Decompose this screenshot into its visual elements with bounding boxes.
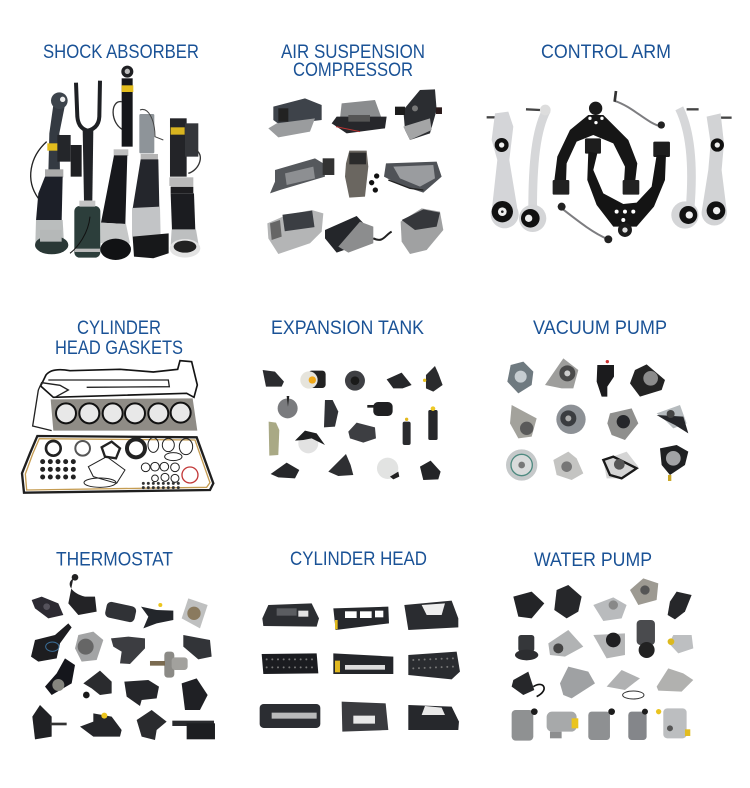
tank r2-3 xyxy=(367,402,393,416)
black upper arm xyxy=(553,102,639,195)
panel: vacuum pump xyxy=(506,317,688,481)
compressor 2 xyxy=(332,100,387,133)
panel: cylinder head gaskets xyxy=(22,317,213,493)
thermostat r3-1 xyxy=(45,658,75,695)
pump r2-1 xyxy=(510,405,537,438)
tank r4-1 xyxy=(271,463,299,478)
compressor 7 xyxy=(267,210,323,254)
thermostat r4-3 xyxy=(137,710,167,740)
pump r2-4 xyxy=(637,620,655,658)
pump r1-2 xyxy=(545,358,578,388)
pump r1-3 xyxy=(593,597,627,621)
cover r2-3 xyxy=(408,652,460,679)
pump r3-3 xyxy=(607,670,644,699)
thermostat r1-2 xyxy=(68,574,97,615)
cover r3-1 xyxy=(260,704,320,728)
tank r4-3 xyxy=(377,458,399,479)
heading: cylinder head gaskets: HEAD GASKETS xyxy=(55,337,183,359)
photo: gasket set xyxy=(22,361,213,493)
pump r4-2 xyxy=(547,712,578,738)
tank r1-4 xyxy=(387,373,412,388)
cover r2-1 xyxy=(262,653,318,674)
lower gasket with parts xyxy=(22,436,213,493)
tank r1-3 xyxy=(345,371,365,391)
heading: shock absorber: SHOCK ABSORBER xyxy=(43,41,199,63)
pump r1-4 xyxy=(630,578,658,605)
photo: five air struts xyxy=(31,66,200,260)
cover r1-3 xyxy=(404,601,458,630)
tank r3-3 xyxy=(348,423,376,443)
heading: air suspension compressor: COMPRESSOR xyxy=(293,59,413,81)
pump r2-4 xyxy=(657,405,688,433)
thermostat r4-1 xyxy=(32,705,67,739)
tank r2-4 xyxy=(428,406,438,440)
pump r1-5 xyxy=(668,592,692,619)
thermostat r1-4 xyxy=(141,603,173,628)
cover r1-2 xyxy=(333,607,389,630)
photo: nine valve covers xyxy=(260,601,460,732)
pump r4-5 xyxy=(656,708,690,738)
tank r2-1 xyxy=(278,396,298,418)
pump r2-2 xyxy=(548,630,583,657)
heading: air suspension compressor xyxy=(281,41,425,81)
thermostat r2-5 xyxy=(183,635,212,659)
panel: thermostat xyxy=(31,548,215,740)
photo: nine compressors xyxy=(267,89,443,254)
heading: vacuum pump: VACUUM PUMP xyxy=(533,317,667,339)
strut 1 xyxy=(31,92,82,254)
photo: nineteen water pumps xyxy=(512,578,693,741)
strut 3 xyxy=(100,66,133,260)
photo: control arms set xyxy=(487,91,732,243)
pump r2-2 xyxy=(556,405,586,434)
heading: thermostat: THERMOSTAT xyxy=(56,548,173,570)
strut 2: fork xyxy=(70,81,100,258)
aluminium arm right curved xyxy=(671,108,699,229)
thermostat r2-2 xyxy=(75,632,103,662)
aluminium arm far left xyxy=(487,112,519,228)
panel: shock absorber xyxy=(31,41,200,260)
stabiliser link lower xyxy=(558,203,612,243)
pump r1-1 xyxy=(507,362,533,393)
pump r3-3 xyxy=(603,452,638,478)
pump r4-1 xyxy=(512,708,538,741)
thermostat r1-1 xyxy=(32,597,63,618)
compressor 1 xyxy=(268,98,322,137)
photo: eighteen thermostats xyxy=(31,574,215,740)
tank r1-1 xyxy=(263,370,284,387)
heading: cylinder head gaskets xyxy=(55,317,183,359)
pump r1-3 xyxy=(597,360,614,397)
pump r3-4 xyxy=(660,445,688,481)
panel: water pump xyxy=(512,549,693,741)
heading: air suspension compressor: AIR SUSPENSION xyxy=(281,41,425,63)
heading: water pump: WATER PUMP xyxy=(534,549,652,571)
tank r2-2 xyxy=(324,400,338,427)
inner gasket loop xyxy=(33,380,169,431)
pump r1-2 xyxy=(554,585,582,618)
black lower arm xyxy=(585,138,670,237)
panel: control arm xyxy=(487,41,732,243)
thermostat r1-5 xyxy=(182,598,208,628)
tank r3-4 xyxy=(403,418,411,445)
pump r1-4 xyxy=(630,364,665,397)
heading: cylinder head gaskets: CYLINDER xyxy=(77,317,161,339)
tank r3-2 xyxy=(295,431,325,453)
pump r3-4 xyxy=(657,668,693,692)
cover r1-1 xyxy=(262,603,319,627)
cover r3-3 xyxy=(408,705,459,730)
pump r3-2 xyxy=(560,667,595,698)
pump r4-4 xyxy=(628,709,648,740)
pump r2-5 xyxy=(668,635,693,653)
thermostat r1-3 xyxy=(104,601,137,623)
compressor 5 xyxy=(345,151,379,198)
cover r3-2 xyxy=(342,702,388,732)
pump r3-1 xyxy=(506,449,537,481)
pump r2-3 xyxy=(607,408,638,440)
thermostat r2-4 xyxy=(150,652,188,678)
panel: cylinder head xyxy=(260,548,460,732)
tank r4-2 xyxy=(328,454,353,476)
tank r1-5 xyxy=(423,366,443,392)
thermostat r3-4 xyxy=(182,678,208,710)
pump r1-1 xyxy=(513,592,544,618)
strut 5 xyxy=(169,118,200,258)
aluminium arm far right xyxy=(702,113,732,226)
tank r3-1 xyxy=(269,422,279,456)
aluminium arm left curved xyxy=(519,105,551,232)
compressor 8 xyxy=(325,216,392,253)
thermostat r2-3 xyxy=(111,637,145,664)
compressor 6 xyxy=(384,162,442,193)
pump r4-3 xyxy=(588,708,615,740)
strut 4 xyxy=(132,109,169,258)
compressor 4 xyxy=(270,158,334,193)
pump r3-1 xyxy=(512,672,544,697)
pump r3-2 xyxy=(553,452,583,480)
tank r1-2 xyxy=(300,371,326,389)
panel: air suspension compressor xyxy=(267,41,443,254)
thermostat r4-2 xyxy=(80,713,122,737)
cover r2-2 xyxy=(333,653,393,674)
thermostat r4-4 xyxy=(172,721,215,739)
stabiliser link upper xyxy=(614,91,665,129)
pump r2-1 xyxy=(515,635,538,660)
valve cover gasket xyxy=(41,361,197,397)
photo: fifteen expansion tanks xyxy=(263,366,443,480)
tank r4-4 xyxy=(420,461,441,480)
compressor 3 xyxy=(395,89,442,140)
thermostat r2-1 xyxy=(31,623,72,662)
photo: twelve vacuum pumps xyxy=(506,358,688,481)
pump r2-3 xyxy=(593,633,625,658)
panel: expansion tank xyxy=(263,317,443,480)
thermostat r3-2 xyxy=(83,671,112,698)
heading: cylinder head: CYLINDER HEAD xyxy=(290,548,427,570)
thermostat r3-3 xyxy=(124,680,159,706)
heading: expansion tank: EXPANSION TANK xyxy=(271,317,424,339)
compressor 9 xyxy=(401,208,443,254)
heading: control arm: CONTROL ARM xyxy=(541,41,671,63)
head gasket plate xyxy=(51,398,197,431)
